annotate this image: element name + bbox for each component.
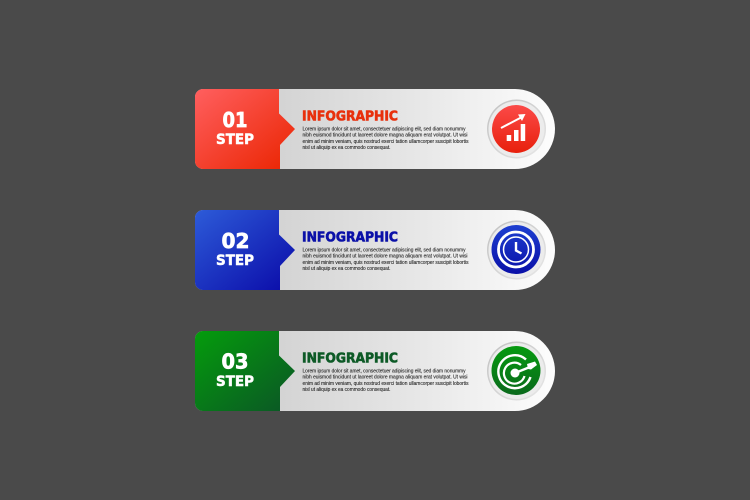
heading 3: INFOGRAPHIC [302,352,398,366]
text block 2: Lorem ipsum dolor sit amet, consectetuer adipiscing elit, sed diam nonummy [302,248,466,254]
text block 2: enim ad minim veniam, quis nostrud exerci tation ullamcorper suscipit lobortis [302,260,469,266]
step 2 tab with arrow [195,210,295,290]
text block 1 [302,126,469,151]
step 1 tab with arrow [195,89,295,169]
card background 1 [195,89,555,169]
text block 1: Lorem ipsum dolor sit amet, consectetuer adipiscing elit, sed diam nonummy [302,126,466,132]
step 3 label: STEP [216,374,254,390]
heading 1: INFOGRAPHIC [302,110,398,124]
text block 1: enim ad minim veniam, quis nostrud exerci tation ullamcorper suscipit lobortis [302,139,469,145]
text block 1: nibh euismod tincidunt ut laoreet dolore magna aliquam erat volutpat. Ut wisi [302,133,468,139]
icon: clock [487,220,546,280]
panel: step 1 [195,89,555,169]
step 1 label [216,108,254,148]
step 1 label: STEP [216,132,254,148]
icon: rising bar chart [487,100,546,158]
text block 3: nibh euismod tincidunt ut laoreet dolore magna aliquam erat volutpat. Ut wisi [302,375,468,381]
text block 2: nisl ut aliquip ex ea commodo consequat. [302,266,390,272]
step 3 label [216,350,254,390]
panel: step 3 [195,331,555,411]
step 3 label: 03 [222,350,248,374]
text block 2 [302,248,469,272]
text block 2: nibh euismod tincidunt ut laoreet dolore magna aliquam erat volutpat. Ut wisi [302,254,468,260]
step 2 label: 02 [222,229,250,253]
step 2 label: STEP [216,253,254,269]
step 2 label [216,229,254,269]
text block 3: nisl ut aliquip ex ea commodo consequat. [302,387,390,393]
text block 1: nisl ut aliquip ex ea commodo consequat. [302,145,390,151]
text block 3 [302,368,469,393]
text block 3: Lorem ipsum dolor sit amet, consectetuer adipiscing elit, sed diam nonummy [302,368,466,374]
step 1 label: 01 [222,108,248,132]
icon: target with arrow [487,342,546,400]
card background 3 [195,331,555,411]
step 3 tab with arrow [195,331,295,411]
text block 3: enim ad minim veniam, quis nostrud exerci tation ullamcorper suscipit lobortis [302,381,469,387]
card background 2 [195,210,555,290]
heading 2: INFOGRAPHIC [302,230,398,246]
panel: step 2 [195,210,555,290]
